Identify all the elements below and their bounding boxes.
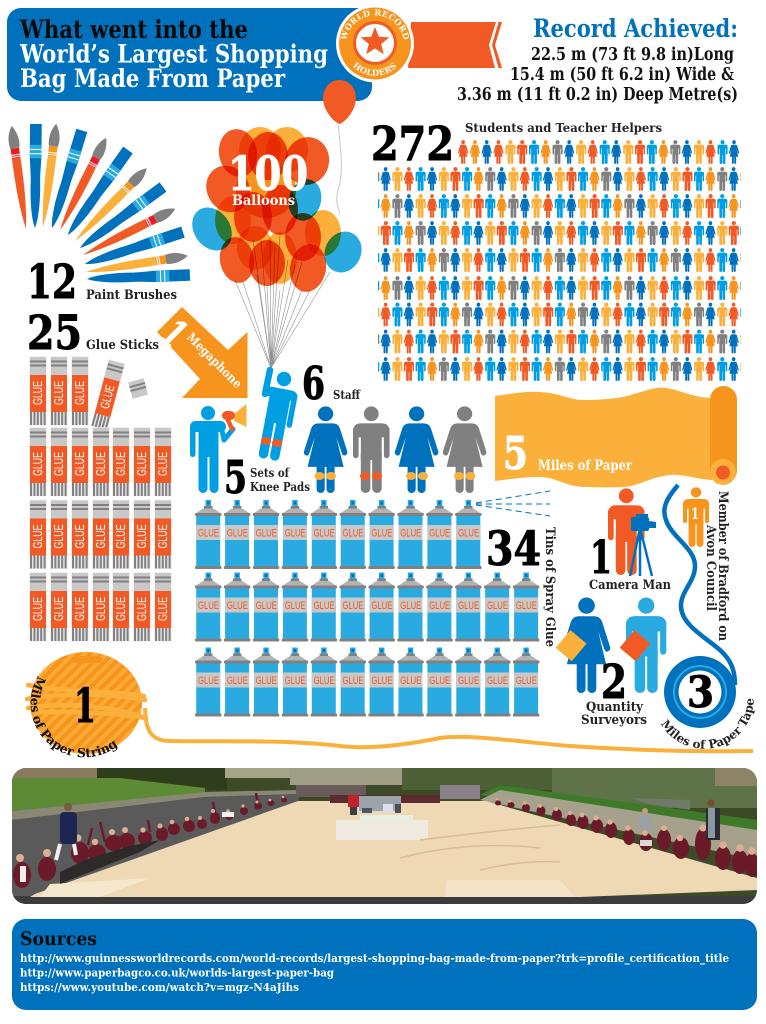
- count: 100 balloons: Balloons: [232, 193, 295, 209]
- count: 25 glue sticks: 25: [27, 306, 82, 361]
- label: member of bradford on avon council: Avon Council: [703, 524, 718, 611]
- count: 12 paint brushes: 12: [27, 255, 77, 310]
- count: 5 miles of paper: Miles of Paper: [538, 458, 633, 474]
- string line: [145, 708, 753, 751]
- teachers right: [639, 800, 720, 840]
- source links: http://www.paperbagco.co.uk/worlds-largest-paper-bag: [20, 966, 334, 980]
- council member: [683, 487, 730, 641]
- ribbon: [408, 22, 502, 68]
- count: 12 paint brushes: [27, 255, 177, 310]
- label: member of bradford on avon council: [703, 491, 730, 641]
- people: 272 students and teacher helpers: [373, 122, 741, 381]
- count: 5 sets of knee pads: Knee Pads: [250, 480, 310, 494]
- knee pads: [314, 472, 476, 480]
- count: 2 quantity surveyors: Quantity: [586, 700, 643, 715]
- string wraps: [27, 685, 146, 718]
- label: students and teacher helpers: Students and Teacher Helpers: [465, 120, 662, 135]
- count: 6 staff: [302, 357, 361, 410]
- title text: Bag Made From Paper: [20, 64, 286, 93]
- count: 1 miles of paper string: 1: [74, 679, 96, 734]
- count: 25 glue sticks: Glue Sticks: [86, 338, 159, 353]
- count: 34 tins of spray glue: 34: [486, 522, 541, 577]
- source links: [20, 951, 729, 994]
- paper sheet: [30, 801, 757, 897]
- count: 1 camera man: [589, 531, 671, 593]
- people grid: [378, 140, 741, 381]
- spray glue tins: [195, 491, 557, 716]
- count: 3 miles of paper tape: [660, 668, 755, 749]
- icon: orange folder: [620, 630, 650, 661]
- icon: yellow folder: [556, 630, 586, 661]
- count: 3 miles of paper tape: 3: [687, 668, 714, 718]
- count: 6 staff: Staff: [333, 387, 361, 402]
- title banner: [7, 8, 372, 101]
- photo: students around the giant paper bag: [12, 768, 759, 904]
- label: member of bradford on avon council: Member of Bradford on: [715, 491, 730, 641]
- count: 272: 272: [371, 117, 454, 172]
- count: 34 tins of spray glue: Tins of Spray Glue: [542, 527, 557, 647]
- arrow: 1 megaphone: [152, 307, 248, 398]
- sources panel: [12, 919, 757, 1010]
- count: 1 miles of paper string: Miles of Paper String: [30, 676, 118, 758]
- count: 5 miles of paper: [503, 427, 633, 480]
- title text: What went into the: [19, 15, 248, 44]
- source links: https://www.youtube.com/watch?v=mgz-N4aJihs: [20, 980, 299, 994]
- students left row: [13, 793, 287, 888]
- paper tape: [660, 484, 755, 749]
- count: 12 paint brushes: Paint Brushes: [86, 288, 177, 303]
- paper roll: 5 miles of paper: [495, 386, 737, 487]
- icon: video camera on tripod: [630, 514, 656, 576]
- badge: world record holders: [336, 8, 414, 82]
- brush fan: [7, 123, 190, 285]
- figure: man with megaphone: [190, 404, 246, 493]
- arrow: 1 megaphone: Megaphone: [184, 330, 245, 391]
- count: 5 sets of knee pads: 5: [224, 451, 247, 504]
- staff figures with knee pads: [304, 406, 486, 493]
- badge: world record holders: WORLD RECORD: [340, 9, 409, 40]
- spray mist: [476, 491, 550, 516]
- balloon: single red with string: [323, 80, 356, 214]
- record achieved: [457, 14, 738, 105]
- council member: 1: [691, 504, 699, 523]
- count: 1 camera man: Camera Man: [589, 578, 671, 593]
- title text: World’s Largest Shopping: [19, 40, 328, 68]
- camera man: [589, 488, 671, 593]
- badge: world record holders: HOLDERS: [352, 62, 396, 76]
- count: 2 quantity surveyors: Surveyors: [581, 713, 647, 728]
- count: 2 quantity surveyors: 2: [601, 655, 627, 710]
- can rows: [195, 500, 539, 716]
- count: 5 sets of knee pads: Sets of: [250, 466, 290, 480]
- balloons cluster: [184, 126, 368, 368]
- count: 3 miles of paper tape: Miles of Paper Tape: [660, 698, 755, 749]
- students far group: [296, 785, 480, 815]
- count: 1 camera man: 1: [590, 531, 612, 584]
- glue sticks: [27, 306, 172, 641]
- count: 6 staff: 6: [302, 357, 325, 410]
- ball of string: [24, 652, 754, 758]
- students right row: [495, 798, 759, 877]
- photo background: [12, 768, 757, 904]
- icon: megaphone: [222, 404, 246, 429]
- stick rows: [29, 356, 172, 641]
- arrow: 1 megaphone: 1: [152, 311, 197, 356]
- balloons: [184, 126, 368, 295]
- figure: jumping staff member with knee pads: [253, 369, 302, 463]
- count: 100 balloons: 100: [228, 147, 308, 202]
- count: 5 miles of paper: 5: [503, 427, 528, 480]
- quantity surveyors: [556, 597, 666, 728]
- count: 2 quantity surveyors: [581, 655, 647, 728]
- balloon strings: [235, 235, 330, 368]
- count: 5 sets of knee pads: [224, 451, 310, 504]
- count: 34 tins of spray glue: [486, 522, 557, 647]
- teacher left: [56, 803, 77, 860]
- title text: [19, 15, 328, 93]
- count: 25 glue sticks: [27, 306, 159, 361]
- paint brushes: [7, 123, 190, 310]
- sources heading: Sources: [20, 928, 97, 950]
